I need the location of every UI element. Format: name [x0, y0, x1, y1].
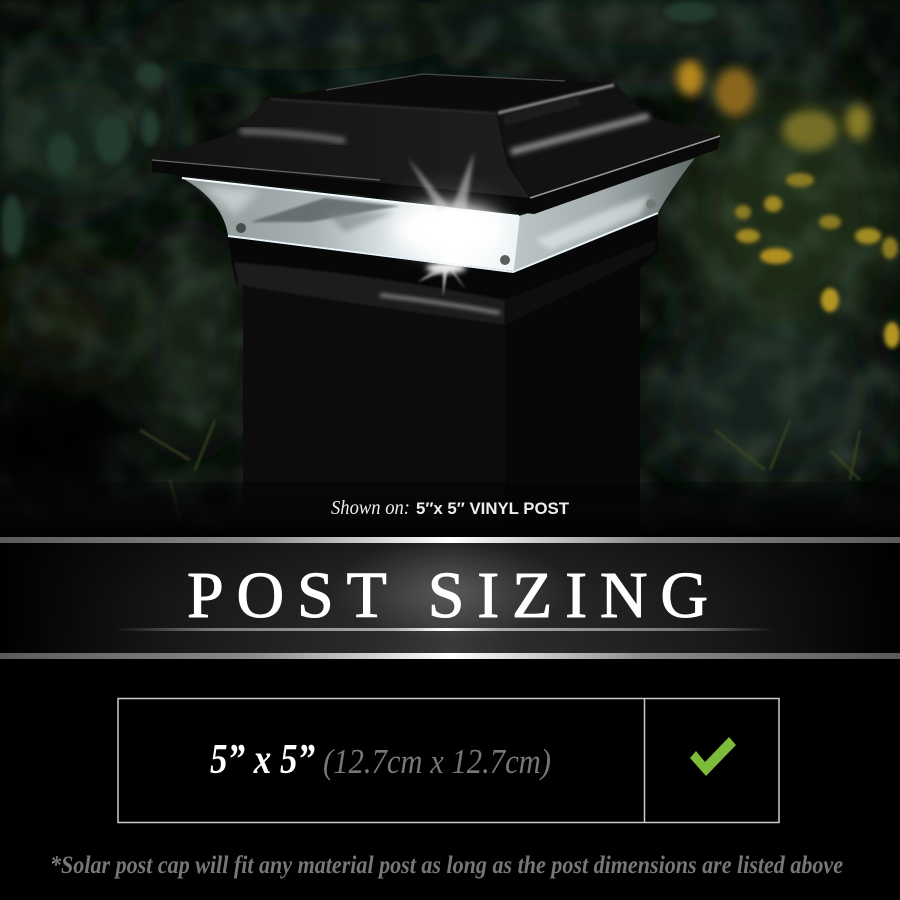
title: POST SIZING	[187, 559, 708, 632]
roof	[152, 74, 720, 214]
caption post size: 5″x 5″ VINYL POST	[416, 499, 570, 518]
size table	[118, 698, 779, 823]
size metric: (12.7cm x 12.7cm)	[323, 742, 551, 781]
top silver bar	[0, 537, 900, 543]
lower collar	[228, 213, 658, 326]
solar post cap	[152, 74, 720, 326]
bottom silver bar	[0, 653, 900, 659]
glass reflections	[182, 178, 658, 272]
glass: left panel	[182, 178, 519, 271]
light flare	[370, 152, 520, 296]
photo caption: Shown on:	[331, 497, 410, 519]
heading band	[0, 537, 900, 659]
photo background: night garden foliage	[0, 0, 900, 540]
thin rule under title	[115, 628, 775, 631]
post	[243, 265, 640, 538]
size imperial: 5” x 5”	[210, 737, 315, 783]
icon: green check mark	[690, 737, 736, 776]
dark post-side shadow	[0, 380, 140, 500]
glass: right panel	[513, 158, 695, 271]
photo bottom fade to black	[0, 482, 900, 540]
